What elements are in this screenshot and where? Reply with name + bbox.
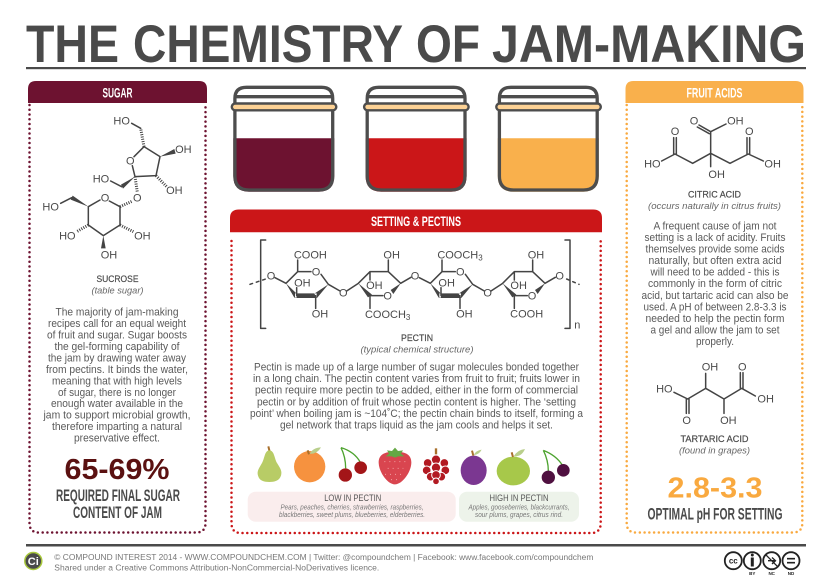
callout: high in pectin: HIGH IN PECTIN bbox=[490, 493, 548, 503]
chemical structure: pectin bbox=[250, 240, 580, 331]
text: fruit acids description: acid, but tartaric acid can also be bbox=[642, 290, 789, 302]
chemical structure: sucrose: OH bbox=[166, 185, 183, 197]
icon: creative commons licence badges: cc bbox=[729, 556, 738, 566]
chemical structure: pectin: OH bbox=[456, 308, 473, 320]
stat: sugar content: 65-69% bbox=[64, 454, 170, 486]
ring 1 bbox=[275, 260, 340, 308]
panel: setting and pectins bbox=[230, 210, 602, 533]
chemical structure: citric acid: OH bbox=[764, 158, 781, 170]
stat: sugar content bbox=[56, 454, 180, 522]
chemical structure: sucrose bbox=[42, 116, 192, 261]
chemical structure: pectin: O bbox=[528, 291, 537, 303]
chemical structure: sucrose: O bbox=[133, 192, 142, 204]
label: tartaric acid: TARTARIC ACID bbox=[680, 434, 749, 445]
title bbox=[26, 15, 806, 74]
chemical structure: pectin: O bbox=[555, 270, 564, 282]
label: citric acid bbox=[648, 190, 781, 212]
text: pectin description: Pectin is made up of a large number of sugar molecules bonded together bbox=[254, 361, 579, 373]
ring 3 bbox=[419, 260, 484, 308]
icon: red cherries bbox=[339, 448, 367, 482]
chemical structure: citric acid: O bbox=[671, 126, 680, 138]
credits text: © COMPOUND INTEREST 2014 - WWW.COMPOUNDCHEM.COM | Twitter: @compoundchem | Facebook: www.facebook.com/compoundchem bbox=[54, 552, 593, 562]
icon: jar of red jam bbox=[364, 87, 469, 192]
icon: pear bbox=[258, 446, 281, 482]
sugar header: SUGAR bbox=[102, 84, 132, 100]
chemical structure: tartaric acid: OH bbox=[757, 393, 774, 405]
title: THE bbox=[26, 15, 119, 74]
chemical structure: pectin: 3 bbox=[478, 253, 483, 262]
chemical structure: citric acid: OH bbox=[708, 169, 725, 181]
icon: compound interest logo: Ci bbox=[28, 556, 39, 568]
chemical structure: tartaric acid: O bbox=[738, 362, 747, 374]
ring 4 bbox=[491, 260, 555, 308]
text: fruit acids description: used. A pH of between 2.8-3.3 is bbox=[644, 301, 786, 313]
chemical structure: pectin: 3 bbox=[406, 313, 411, 322]
text: fruit acids description: needed to help the pectin form bbox=[646, 313, 785, 325]
chemical structure: pectin: COOH bbox=[294, 249, 327, 261]
chemical structure: pectin: n bbox=[574, 319, 580, 331]
footer bbox=[25, 544, 806, 576]
icon: compound interest logo bbox=[25, 552, 42, 570]
pectins header: SETTING & PECTINS bbox=[371, 213, 461, 229]
text: sugar description: the gel-forming capability of bbox=[54, 341, 180, 353]
chemical structure: pectin: COOCH bbox=[437, 249, 478, 261]
text: pectin description: in a long chain. The pectin content varies from fruit to fruit; fruits lower in bbox=[253, 373, 580, 385]
label: sucrose: (table sugar) bbox=[92, 286, 144, 296]
callout: low in pectin bbox=[248, 492, 456, 522]
text: sugar description: jam to support microbial growth, bbox=[43, 410, 191, 422]
chemical structure: pectin: O bbox=[483, 287, 492, 299]
chemical structure: pectin: OH bbox=[438, 277, 455, 289]
fruit icons bbox=[258, 446, 570, 485]
text: sugar description: of fruit and sugar. Sugar boosts bbox=[47, 330, 187, 342]
text: sugar description: The majority of jam-making bbox=[56, 307, 179, 319]
fruit acids header bbox=[626, 81, 804, 103]
pectins header bbox=[230, 210, 602, 232]
chemical structure: pectin: OH bbox=[528, 249, 544, 261]
label: tartaric acid: (found in grapes) bbox=[679, 446, 750, 456]
text: pectin description: gel network that traps liquid as the jam cools and helps it set. bbox=[280, 420, 553, 432]
text: fruit acids description: properly. bbox=[696, 336, 734, 348]
chemical structure: pectin: OH bbox=[366, 280, 383, 292]
chemical structure: sucrose: O bbox=[101, 192, 110, 204]
icon: creative commons licence badges: ND bbox=[788, 571, 795, 576]
chemical structure: tartaric acid: OH bbox=[702, 362, 718, 374]
credits text: Shared under a Creative Commons Attribution-NonCommercial-NoDerivatives licence. bbox=[54, 563, 379, 573]
chemical structure: pectin: OH bbox=[294, 277, 311, 289]
chemical structure: pectin: O bbox=[456, 267, 465, 279]
chemical structure: citric acid: OH bbox=[727, 116, 744, 128]
title: OF bbox=[416, 15, 480, 74]
callout: low in pectin: LOW IN PECTIN bbox=[324, 493, 381, 503]
chemical structure: sucrose: OH bbox=[101, 249, 117, 261]
label: pectin bbox=[360, 333, 474, 356]
callout: low in pectin: blackberries, sweet plums, blueberries, elderberries. bbox=[279, 510, 425, 519]
text: fruit acids description bbox=[642, 221, 789, 348]
text: fruit acids description: will need to be added - this is bbox=[650, 267, 780, 279]
text: sugar description: of sugar, there is no longer bbox=[58, 387, 176, 399]
text: fruit acids description: naturally, but often extra acid bbox=[648, 255, 782, 267]
chemical structure: sucrose: HO bbox=[113, 116, 130, 128]
text: fruit acids description: A frequent cause of jam not bbox=[654, 221, 777, 233]
label: pectin: PECTIN bbox=[401, 333, 433, 344]
text: fruit acids description: themselves provide some acids bbox=[646, 244, 784, 256]
callout: low in pectin: Pears, peaches, cherries, strawberries, raspberries, bbox=[280, 503, 424, 512]
text: sugar description: the jam by drawing water away bbox=[48, 352, 187, 364]
text: pectin description: pectin or by addition of fruit whose pectin content is higher. The ‘setting bbox=[257, 396, 576, 408]
icon: apple bbox=[497, 449, 530, 485]
text: fruit acids description: a gel and allow the jam to set bbox=[650, 324, 780, 336]
title: JAM-MAKING bbox=[492, 15, 806, 74]
chemical structure: pectin: OH bbox=[312, 308, 328, 320]
chemical structure: pectin: COOCH bbox=[365, 309, 406, 321]
icon: jar of orange jam bbox=[496, 87, 601, 192]
chemical structure: sucrose: OH bbox=[134, 231, 151, 243]
chemical structure: tartaric acid: O bbox=[682, 415, 691, 427]
chemical structure: pectin: O bbox=[339, 287, 348, 299]
chemical structure: citric acid: O bbox=[745, 126, 754, 138]
chemical structure: citric acid bbox=[644, 116, 781, 181]
chemical structure: citric acid: HO bbox=[644, 158, 661, 170]
icon: jar of dark jam bbox=[232, 87, 336, 192]
icon: creative commons licence badges: NC bbox=[768, 571, 776, 576]
chemical structure: sucrose: HO bbox=[59, 231, 76, 243]
label: tartaric acid bbox=[679, 434, 750, 456]
label: citric acid: CITRIC ACID bbox=[688, 190, 741, 200]
text: sugar description: meaning that with high levels bbox=[52, 375, 182, 387]
callout: high in pectin: sour plums, grapes, citrus rind. bbox=[475, 510, 563, 519]
icon: strawberry bbox=[379, 448, 411, 484]
chemical structure: pectin: OH bbox=[383, 249, 400, 261]
icon: raspberry bbox=[422, 448, 450, 485]
panel: sugar bbox=[28, 81, 207, 532]
callout: high in pectin: Apples, gooseberries, blackcurrants, bbox=[468, 503, 570, 512]
chemical structure: pectin: O bbox=[383, 291, 392, 303]
callout: high in pectin bbox=[459, 492, 579, 522]
chemical structure: tartaric acid: OH bbox=[720, 415, 737, 427]
stat: sugar content: REQUIRED FINAL SUGAR bbox=[56, 487, 180, 505]
label: sucrose bbox=[92, 274, 144, 296]
text: sugar description: enough water available in the bbox=[51, 398, 183, 410]
text: fruit acids description: commonly in the form of citric bbox=[648, 278, 783, 290]
fruit acids header: FRUIT ACIDS bbox=[686, 84, 742, 100]
stat: optimal pH: 2.8-3.3 bbox=[668, 473, 762, 505]
panel: fruit acids bbox=[626, 81, 804, 532]
text: sugar description: therefore imparting a natural bbox=[52, 421, 182, 433]
sugar header bbox=[28, 81, 207, 103]
stat: optimal pH bbox=[648, 473, 782, 523]
text: pectin description: point’ when boiling jam is ~104˚C; the pectin chain binds to itself, forming a bbox=[250, 408, 583, 420]
chemical structure: sucrose: O bbox=[126, 156, 135, 168]
text: fruit acids description: setting is a lack of acidity. Fruits bbox=[644, 232, 786, 244]
text: sugar description: from pectins. It binds the water, bbox=[46, 364, 188, 376]
icon: orange bbox=[294, 447, 325, 482]
chemical structure: pectin: OH bbox=[510, 280, 527, 292]
chemical structure: tartaric acid: HO bbox=[656, 383, 673, 395]
credits text bbox=[54, 552, 593, 573]
chemical structure: sucrose: HO bbox=[42, 202, 59, 214]
label: sucrose: SUCROSE bbox=[96, 274, 138, 285]
title: CHEMISTRY bbox=[133, 15, 403, 74]
icon: creative commons licence badges bbox=[725, 552, 800, 576]
icon: creative commons licence badges: BY bbox=[749, 571, 755, 576]
label: pectin: (typical chemical structure) bbox=[360, 344, 474, 356]
icon: dark cherries bbox=[542, 450, 570, 484]
chemical structure: sucrose: HO bbox=[93, 173, 110, 185]
text: pectin description bbox=[250, 361, 583, 432]
chemical structure: pectin: O bbox=[267, 270, 276, 282]
chemical structure: pectin: COOH bbox=[510, 308, 543, 320]
stat: sugar content: CONTENT OF JAM bbox=[73, 504, 162, 522]
text: sugar description: recipes call for an equal weight bbox=[48, 318, 186, 330]
chemical structure: sucrose: OH bbox=[175, 144, 192, 156]
text: sugar description: preservative effect. bbox=[74, 433, 160, 445]
icon: plum bbox=[461, 450, 487, 485]
chemical structure: tartaric acid bbox=[656, 362, 774, 427]
chemical structure: pectin: O bbox=[312, 267, 321, 279]
text: sugar description bbox=[43, 307, 191, 445]
ring 2 bbox=[347, 260, 411, 308]
chemical structure: pectin: O bbox=[411, 270, 420, 282]
label: citric acid: (occurs naturally in citrus fruits) bbox=[648, 201, 781, 212]
text: pectin description: pectin require more pectin to be added, either in the form of commercial bbox=[255, 385, 578, 397]
chemical structure: citric acid: O bbox=[690, 116, 699, 128]
